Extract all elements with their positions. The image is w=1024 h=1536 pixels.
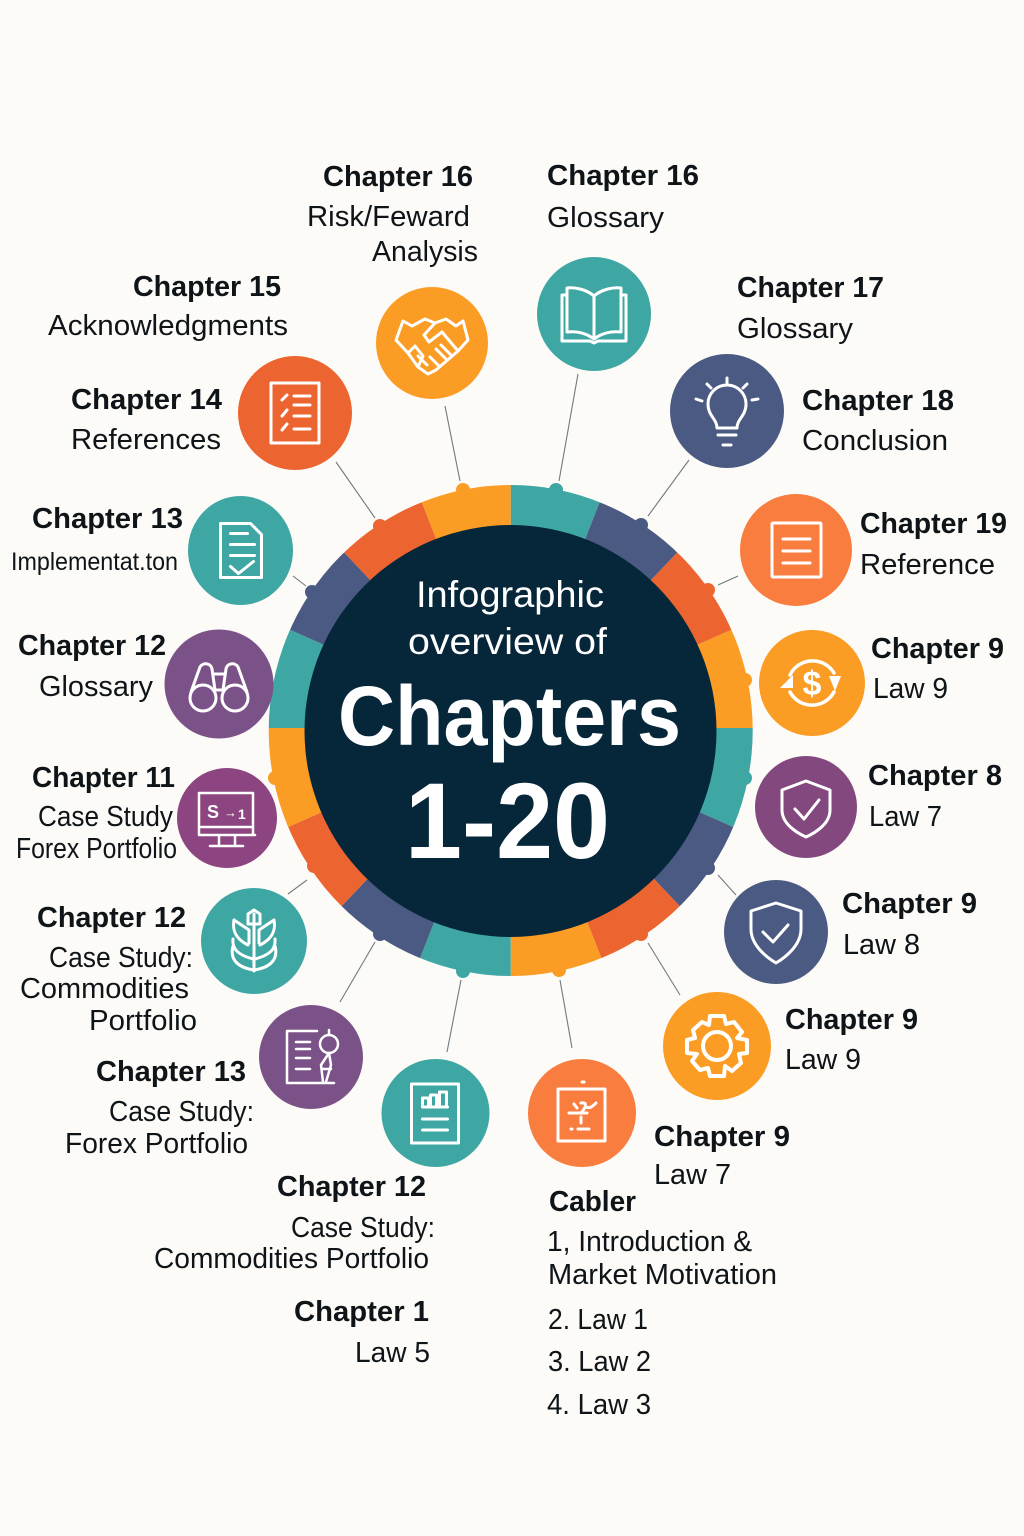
label: Chapter 9 Law 8: [842, 888, 977, 961]
node: open book icon: [537, 257, 651, 371]
label: Chapter 9 Law 7 lower: Law 7: [654, 1159, 731, 1191]
label: Cabler list: 4. Law 3: [547, 1389, 651, 1421]
label: Chapter 17 Glossary: Glossary: [737, 313, 853, 345]
label: Chapter 14 References: Chapter 14: [71, 384, 222, 416]
label: Chapter 12 Case Study Commodities Portfolio: Portfolio: [89, 1005, 197, 1037]
label: Chapter 8 Law 7: Law 7: [869, 801, 942, 833]
label: Chapter 9 Law 8: Chapter 9: [842, 888, 977, 920]
label: Chapter 14 References: References: [71, 424, 221, 456]
label: Chapter 16 Glossary: [547, 160, 699, 234]
label: Cabler list: Cabler: [549, 1186, 636, 1218]
label: Chapter 15 Acknowledgments: Chapter 15: [133, 271, 281, 303]
label: Chapter 16 Risk/Feward Analysis: Analysis: [372, 236, 478, 268]
label: Cabler list: 3. Law 2: [548, 1346, 651, 1378]
label: Cabler list: [547, 1186, 777, 1421]
centre title: [338, 574, 681, 881]
label: Chapter 12 Case Study Commodities Portfolio lower: Chapter 12: [277, 1171, 426, 1203]
label: Chapter 12 Case Study Commodities Portfolio lower: [154, 1171, 435, 1275]
label: Chapter 12 Glossary: Chapter 12: [18, 630, 166, 662]
label: Chapter 17 Glossary: Chapter 17: [737, 272, 884, 304]
label: Chapter 9 Law 9: [871, 633, 1004, 705]
label: Chapter 16 Glossary: Chapter 16: [547, 160, 699, 192]
label: Chapter 13 Case Study Forex Portfolio: [65, 1056, 254, 1160]
label: Chapter 1 Law 5: Law 5: [355, 1337, 430, 1369]
label: Cabler list: Market Motivation: [548, 1259, 777, 1291]
label: Chapter 16 Risk/Feward Analysis: Risk/Feward: [307, 201, 470, 233]
label: Chapter 8 Law 7: [868, 760, 1002, 833]
label: Chapter 13 Case Study Forex Portfolio: Case Study:: [109, 1096, 254, 1128]
node: sketch board icon: [528, 1059, 636, 1167]
label: Chapter 8 Law 7: Chapter 8: [868, 760, 1002, 792]
label: Cabler list: 1, Introduction &: [547, 1226, 752, 1258]
label: Chapter 1 Law 5: Chapter 1: [294, 1296, 429, 1328]
label: Chapter 9 Law 9 lower: [785, 1004, 918, 1076]
label: Chapter 9 Law 9: Law 9: [873, 673, 948, 705]
node: handshake icon: [376, 287, 488, 399]
node: gear icon: [663, 992, 771, 1100]
centre title: 1-20: [405, 760, 610, 881]
label: Chapter 9 Law 9: Chapter 9: [871, 633, 1004, 665]
node: document with figure icon: [259, 1005, 363, 1109]
label: Chapter 12 Case Study Commodities Portfolio: Commodities: [20, 973, 189, 1005]
label: Chapter 11 Case Study Forex Portfolio: [16, 762, 177, 865]
label: Chapter 1 Law 5: [294, 1296, 430, 1369]
label: Chapter 16 Risk/Feward Analysis: [307, 161, 478, 268]
label: Chapter 12 Case Study Commodities Portfolio lower: Commodities Portfolio: [154, 1243, 429, 1275]
label: Chapter 11 Case Study Forex Portfolio: Case Study: [38, 801, 173, 833]
label: Chapter 13 Implementat.ton: Chapter 13: [32, 503, 183, 535]
label: Chapter 12 Case Study Commodities Portfolio lower: Case Study:: [291, 1212, 435, 1244]
label: Chapter 14 References: [71, 384, 222, 456]
label: Chapter 9 Law 7 lower: [654, 1121, 790, 1191]
node: report chart icon: [382, 1059, 490, 1167]
node: monitor icon: 1: [238, 806, 246, 822]
node: shield check purple icon: [755, 756, 857, 858]
label: Chapter 15 Acknowledgments: Acknowledgments: [48, 310, 288, 342]
label: Chapter 16 Glossary: Glossary: [547, 202, 665, 234]
label: Chapter 13 Implementat.ton: [11, 503, 183, 576]
label: Chapter 18 Conclusion: Chapter 18: [802, 385, 954, 417]
label: Chapter 9 Law 8: Law 8: [843, 929, 920, 961]
label: Chapter 15 Acknowledgments: [48, 271, 288, 342]
label: Chapter 19 Reference: [860, 508, 1007, 581]
label: Chapter 13 Implementat.ton: Implementat.ton: [11, 548, 178, 576]
node: light bulb icon: [670, 354, 784, 468]
node: dollar cycle icon: [759, 630, 865, 736]
label: Chapter 13 Case Study Forex Portfolio: Chapter 13: [96, 1056, 246, 1088]
central dark disc: [304, 525, 716, 937]
centre title: Chapters: [338, 669, 681, 763]
label: Chapter 19 Reference: Reference: [860, 549, 995, 581]
node: wheat icon: [201, 888, 307, 994]
label: Chapter 17 Glossary: [737, 272, 884, 345]
label: Chapter 9 Law 9 lower: Chapter 9: [785, 1004, 918, 1036]
label: Chapter 13 Case Study Forex Portfolio: Forex Portfolio: [65, 1128, 248, 1160]
ring connector knobs: [268, 483, 752, 978]
label: Chapter 12 Glossary: [18, 630, 166, 703]
centre title: Infographic: [416, 574, 604, 615]
node: document with check icon: [188, 496, 293, 605]
label: Chapter 18 Conclusion: Conclusion: [802, 425, 948, 457]
node: checklist document icon: [238, 356, 352, 470]
node: binoculars icon: [164, 630, 274, 738]
node: monitor icon: →: [224, 805, 237, 820]
label: Chapter 12 Case Study Commodities Portfolio: Chapter 12: [37, 902, 186, 934]
label: Chapter 11 Case Study Forex Portfolio: Chapter 11: [32, 762, 175, 794]
label: Chapter 9 Law 9 lower: Law 9: [785, 1044, 861, 1076]
node: shield check navy icon: [724, 880, 828, 984]
chapter labels: [11, 160, 1007, 1421]
label: Chapter 19 Reference: Chapter 19: [860, 508, 1007, 540]
label: Chapter 16 Risk/Feward Analysis: Chapter 16: [323, 161, 473, 193]
label: Cabler list: 2. Law 1: [548, 1304, 648, 1336]
centre title: overview of: [408, 621, 608, 662]
label: Chapter 12 Case Study Commodities Portfolio: [20, 902, 197, 1037]
label: Chapter 11 Case Study Forex Portfolio: Forex Portfolio: [16, 833, 177, 865]
connector lines: [288, 374, 738, 1052]
node: monitor icon: S: [207, 802, 219, 822]
label: Chapter 12 Glossary: Glossary: [39, 671, 153, 703]
label: Chapter 9 Law 7 lower: Chapter 9: [654, 1121, 790, 1153]
node: lined document icon: [740, 494, 852, 606]
node: dollar cycle icon: $: [803, 665, 822, 703]
central ring of 16 coloured segments: [268, 485, 753, 976]
node: monitor icon: [177, 768, 277, 868]
label: Chapter 18 Conclusion: [802, 385, 954, 457]
label: Chapter 12 Case Study Commodities Portfolio: Case Study:: [49, 942, 193, 974]
